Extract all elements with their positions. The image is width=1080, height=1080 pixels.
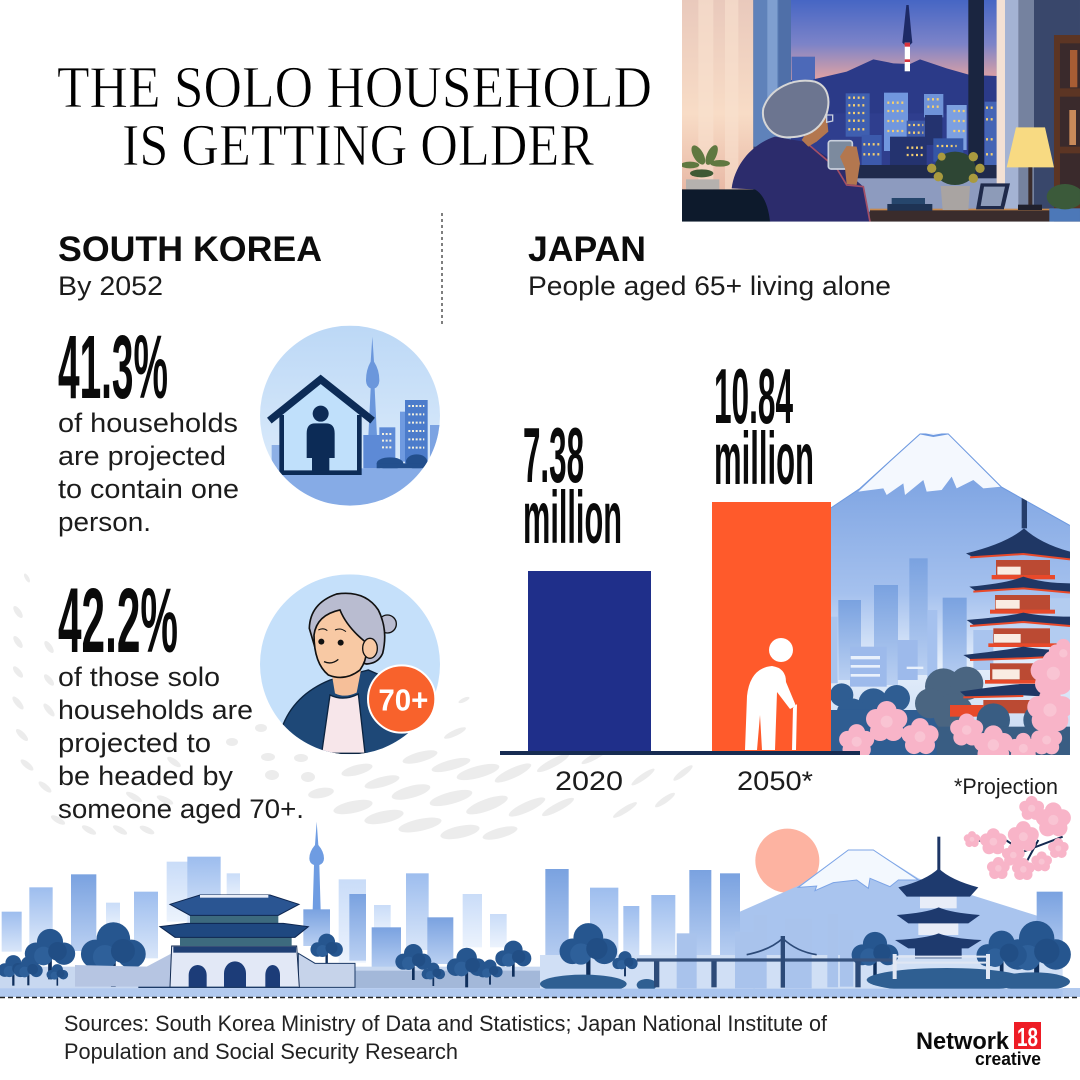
footer divider — [0, 996, 1080, 998]
cherry branch — [964, 796, 1071, 880]
bridge — [637, 936, 893, 988]
logo: Network 18 creative: 18 — [1017, 1022, 1038, 1052]
stat: 42.2% of solo households — [58, 570, 304, 824]
sources: Population and Social Security Research — [64, 1039, 458, 1064]
badge: 70+: 70+ — [378, 684, 428, 718]
gate: Gwanghwamun — [160, 895, 308, 987]
stat: 42.2% of solo households: someone aged 70+. — [58, 794, 304, 824]
stat: 42.2% of solo households: of those solo — [58, 662, 220, 692]
sources: Sources: South Korea Ministry of Data and Statistics; Japan National Institute of — [64, 1011, 828, 1036]
title — [57, 54, 652, 178]
pagoda — [950, 478, 1070, 717]
value: 10.84 million: 10.84 — [714, 352, 793, 440]
panel: South Korea heading: SOUTH KOREA — [58, 230, 322, 269]
illustration: elderly woman at window overlooking Seoul — [681, 0, 1080, 222]
illustration: Mount Fuji, city and pagoda — [830, 430, 1078, 763]
bar chart: Japan elderly living alone — [500, 352, 860, 796]
badge: 70+ — [368, 665, 435, 733]
logo: Network 18 creative: Network — [916, 1028, 1010, 1055]
panel: South Korea heading: By 2052 — [58, 271, 163, 301]
illustration: Seoul skyline — [0, 822, 540, 988]
panel: Japan heading — [528, 230, 891, 301]
stat: 42.2% of solo households: projected to — [58, 728, 211, 758]
cherry blossoms — [839, 639, 1078, 763]
icon: elderly woman with 70+ badge — [260, 574, 440, 754]
title: THE SOLO HOUSEHOLD — [57, 54, 652, 120]
icon: solo house with Seoul skyline — [260, 326, 440, 507]
label: 2020: 2020 — [555, 766, 623, 796]
stat: 42.2% of solo households: be headed by — [58, 761, 234, 791]
divider — [441, 213, 443, 325]
bar chart: Japan elderly living alone: million — [714, 417, 814, 500]
stat: 42.2% of solo households: 42.2% — [58, 570, 178, 672]
stat: 41.3% of households: of households — [58, 408, 238, 438]
ground strip — [0, 988, 1080, 997]
value: 7.38 million — [523, 411, 622, 559]
panel: Japan heading: People aged 65+ living alone — [528, 271, 891, 301]
bar: 2050 projection — [712, 502, 831, 751]
logo: Network 18 creative — [916, 1022, 1041, 1069]
decorative wave pattern — [11, 573, 694, 842]
stat: 41.3% of households: to contain one — [58, 474, 239, 504]
value: 7.38 million: 7.38 — [523, 411, 584, 499]
icon: elderly figure with cane — [745, 638, 797, 750]
bar: 2020 — [528, 571, 651, 751]
title: IS GETTING OLDER — [122, 112, 595, 178]
stat: 41.3% of households: 41.3% — [58, 318, 168, 418]
value: 10.84 million — [714, 352, 814, 500]
illustration: Japan skyline — [540, 796, 1071, 998]
panel: South Korea heading — [58, 230, 322, 301]
logo: Network 18 creative: creative — [975, 1049, 1041, 1069]
sources — [64, 1011, 828, 1064]
note: projection: *Projection — [954, 774, 1058, 799]
pagoda — [893, 837, 990, 979]
stat: 42.2% of solo households: households are — [58, 695, 253, 725]
bar chart: Japan elderly living alone: million — [523, 476, 622, 559]
label: 2050: 2050* — [737, 766, 814, 796]
stat: 41.3% of households: are projected — [58, 441, 226, 471]
stat: 41.3% of households: person. — [58, 507, 151, 537]
panel: Japan heading: JAPAN — [528, 230, 646, 269]
axis — [500, 751, 860, 755]
stat: 41.3% of households — [58, 318, 239, 537]
